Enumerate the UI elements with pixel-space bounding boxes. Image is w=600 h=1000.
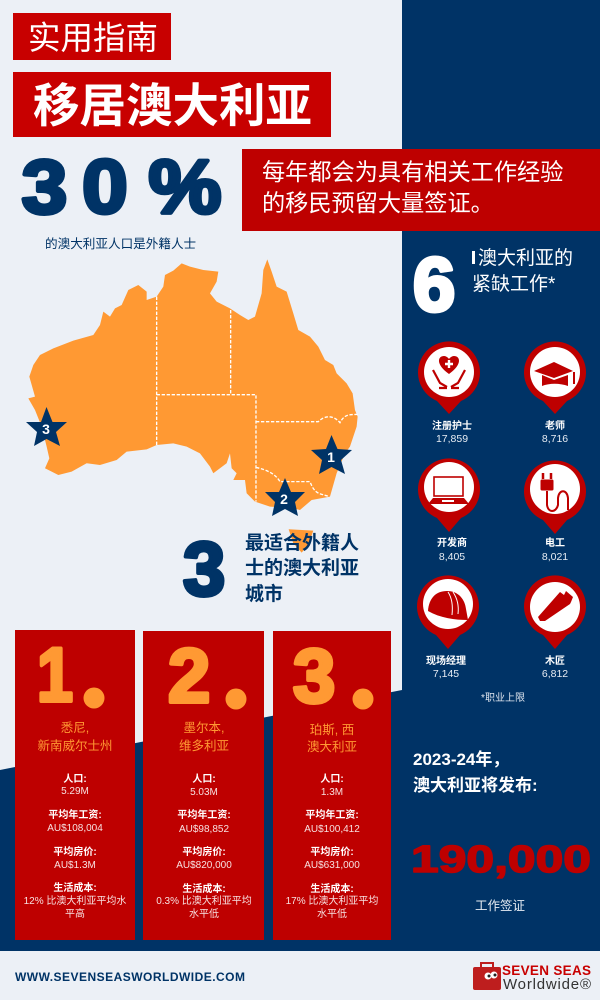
card: Sydney: 人口: xyxy=(63,773,87,785)
job: electrician: 8,021 xyxy=(542,551,568,563)
heading: 3 best cities: 最适合外籍人 xyxy=(245,532,359,554)
card: Perth: 1.3M xyxy=(321,787,343,798)
card: Melbourne: 生活成本: xyxy=(182,882,226,895)
card: Perth: AU$100,412 xyxy=(304,824,360,835)
map of Australia xyxy=(26,259,358,553)
city star 2 xyxy=(265,478,305,516)
card: Sydney: 平均年工资: xyxy=(48,808,102,821)
card: Melbourne xyxy=(143,631,264,940)
icon: hand saw xyxy=(538,591,573,621)
callout: visas reserved xyxy=(242,149,600,231)
stat: 30 percent: 30% xyxy=(22,144,221,229)
tag: practical guide xyxy=(13,13,171,60)
visa heading: 澳大利亚将发布: xyxy=(413,775,538,795)
state borders xyxy=(157,297,358,502)
logo: Seven Seas Worldwide xyxy=(473,963,591,993)
heading: 6 in-demand jobs xyxy=(413,243,573,328)
heading: 6 in-demand jobs: 澳大利亚的 xyxy=(478,247,573,269)
card: Melbourne: AU$98,852 xyxy=(179,824,229,835)
card: Sydney: 12% 比澳大利亚平均水 xyxy=(24,894,126,907)
card: Perth: 生活成本: xyxy=(310,882,354,895)
card: Sydney: 平高 xyxy=(65,907,85,920)
card: Sydney: AU$1.3M xyxy=(54,860,96,871)
job: teacher xyxy=(524,341,586,445)
job: carpenter: 6,812 xyxy=(542,668,568,680)
card: Perth: 澳大利亚 xyxy=(307,740,357,754)
visa heading xyxy=(413,749,538,795)
stat caption: 的澳大利亚人口是外籍人士 xyxy=(45,236,196,251)
card: Sydney: 5.29M xyxy=(61,786,89,797)
job: carpenter: 木匠 xyxy=(545,654,565,667)
icon: heart in hands xyxy=(433,356,465,388)
card: Melbourne: 2 xyxy=(168,634,210,719)
card: Sydney: 平均房价: xyxy=(53,845,97,858)
job: developer xyxy=(418,458,480,563)
footnote: *职业上限 xyxy=(481,692,525,704)
card: Sydney: 1 xyxy=(37,632,73,717)
card: Perth: 3 xyxy=(293,634,335,719)
job: registered nurse: 17,859 xyxy=(436,433,468,445)
job: carpenter xyxy=(524,575,586,680)
job: developer: 8,405 xyxy=(439,551,465,563)
icon: graduation cap xyxy=(534,362,575,386)
job: registered nurse xyxy=(418,341,480,445)
Tasmania xyxy=(289,529,313,553)
card: Sydney: 新南威尔士州 xyxy=(37,738,113,753)
icon: hard hat xyxy=(428,591,468,620)
job: developer: 开发商 xyxy=(437,536,467,549)
card: Sydney: 悉尼, xyxy=(61,721,89,735)
card: Perth: 水平低 xyxy=(317,907,347,920)
card: Melbourne: 5.03M xyxy=(190,787,218,798)
card: Melbourne: 平均年工资: xyxy=(177,808,231,821)
job: teacher: 老师 xyxy=(545,419,565,432)
city star 1 xyxy=(311,435,352,474)
card: Sydney xyxy=(15,630,135,940)
heading: 6 in-demand jobs: 紧缺工作* xyxy=(472,273,556,295)
card: Sydney: AU$108,004 xyxy=(47,823,103,834)
card: Melbourne: 平均房价: xyxy=(182,845,226,858)
card: Perth: AU$631,000 xyxy=(304,860,360,871)
card: Perth: 平均房价: xyxy=(310,845,354,858)
card: Perth xyxy=(273,631,391,940)
logo: Seven Seas Worldwide: Worldwide® xyxy=(503,976,591,993)
card: Melbourne: 0.3% 比澳大利亚平均 xyxy=(156,894,252,907)
card: Melbourne: 维多利亚 xyxy=(179,739,229,753)
card: Melbourne: 人口: xyxy=(192,773,216,785)
visa caption: 工作签证 xyxy=(475,898,525,913)
job: electrician xyxy=(524,460,586,563)
job: site manager: 7,145 xyxy=(433,668,459,680)
card: Melbourne: AU$820,000 xyxy=(176,860,232,871)
card: Melbourne: 墨尔本, xyxy=(184,720,224,735)
card: Melbourne: 水平低 xyxy=(189,907,219,920)
city star 3 xyxy=(26,407,67,446)
visa number: 190,000 xyxy=(411,839,591,881)
city star 2: 2 xyxy=(280,491,288,507)
icon: suitcase xyxy=(473,963,501,990)
callout: visas reserved: 每年都会为具有相关工作经验 xyxy=(262,159,563,185)
heading: 6 in-demand jobs: 6 xyxy=(413,243,455,328)
callout: visas reserved: 的移民预留大量签证。 xyxy=(262,190,494,216)
job: site manager xyxy=(417,575,479,680)
card: Perth: 珀斯, 西 xyxy=(310,723,354,737)
city star 1: 1 xyxy=(327,449,335,465)
job: registered nurse: 注册护士 xyxy=(432,419,472,432)
website: WWW.SEVENSEASWORLDWIDE.COM xyxy=(15,970,245,984)
card: Sydney: 生活成本: xyxy=(53,881,97,894)
heading: 3 best cities: 城市 xyxy=(245,582,283,605)
heading: 3 best cities xyxy=(183,527,359,612)
job: site manager: 现场经理 xyxy=(426,654,466,667)
card: Perth: 平均年工资: xyxy=(305,808,359,821)
visa heading: 2023-24年， xyxy=(413,749,509,769)
city star 3: 3 xyxy=(42,421,50,437)
logo: Seven Seas Worldwide: SEVEN SEAS xyxy=(502,963,591,978)
job: electrician: 电工 xyxy=(545,536,565,549)
heading: 3 best cities: 士的澳大利亚 xyxy=(245,557,359,579)
icon: plug and cable xyxy=(541,473,568,511)
job: teacher: 8,716 xyxy=(542,433,568,445)
tag: practical guide: 实用指南 xyxy=(28,20,158,56)
heading: 3 best cities: 3 xyxy=(183,527,225,612)
card: Perth: 17% 比澳大利亚平均 xyxy=(286,894,378,907)
card: Perth: 人口: xyxy=(320,773,344,785)
title: 移居澳大利亚 xyxy=(33,80,312,132)
icon: laptop xyxy=(428,477,469,504)
